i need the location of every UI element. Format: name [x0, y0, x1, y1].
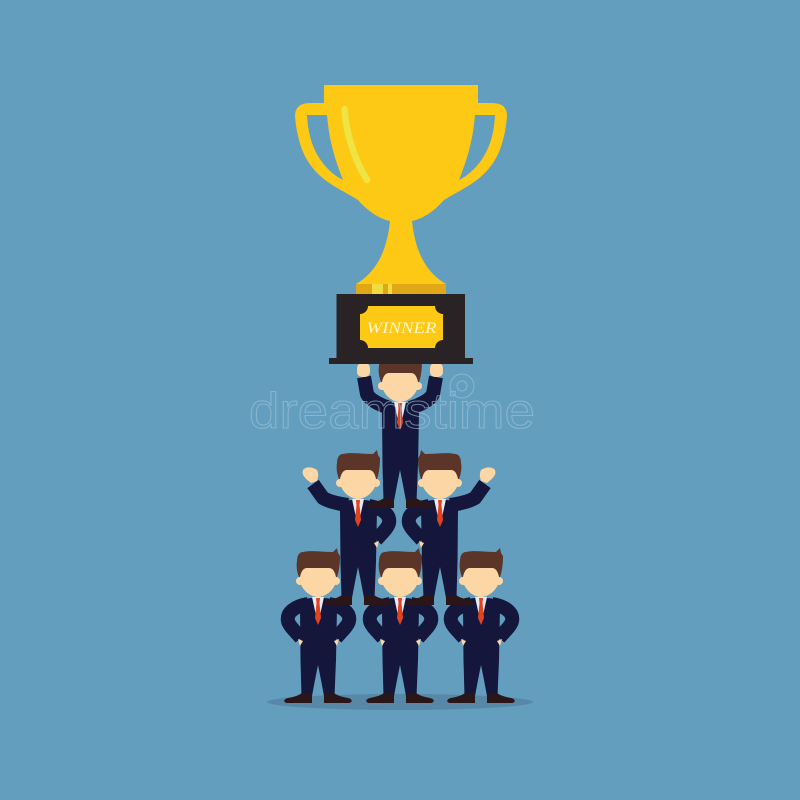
- ground shadow: [267, 694, 533, 710]
- businessman: bottom left: [284, 548, 352, 703]
- businessman: bottom centre: [366, 548, 434, 703]
- businessman: middle right: [406, 450, 495, 605]
- plaque block: [336, 294, 465, 359]
- trophy base band: [356, 284, 446, 294]
- businessman: top, holding the trophy: [357, 353, 443, 508]
- businessman: bottom right: [447, 548, 515, 703]
- plaque foot: [329, 358, 473, 364]
- middle row: two businessmen with raised fists: [303, 450, 495, 605]
- winner label: [360, 306, 443, 348]
- watermark: dreamstime: [249, 383, 535, 439]
- base band highlights: [372, 284, 392, 294]
- trophy cup, handles and stem: [295, 85, 507, 285]
- bottom row: three businessmen: [284, 548, 515, 703]
- winner text: WINNER: [366, 320, 437, 337]
- cup highlight: [344, 109, 367, 180]
- trophy: [295, 85, 507, 364]
- businessman: middle left: [303, 450, 392, 605]
